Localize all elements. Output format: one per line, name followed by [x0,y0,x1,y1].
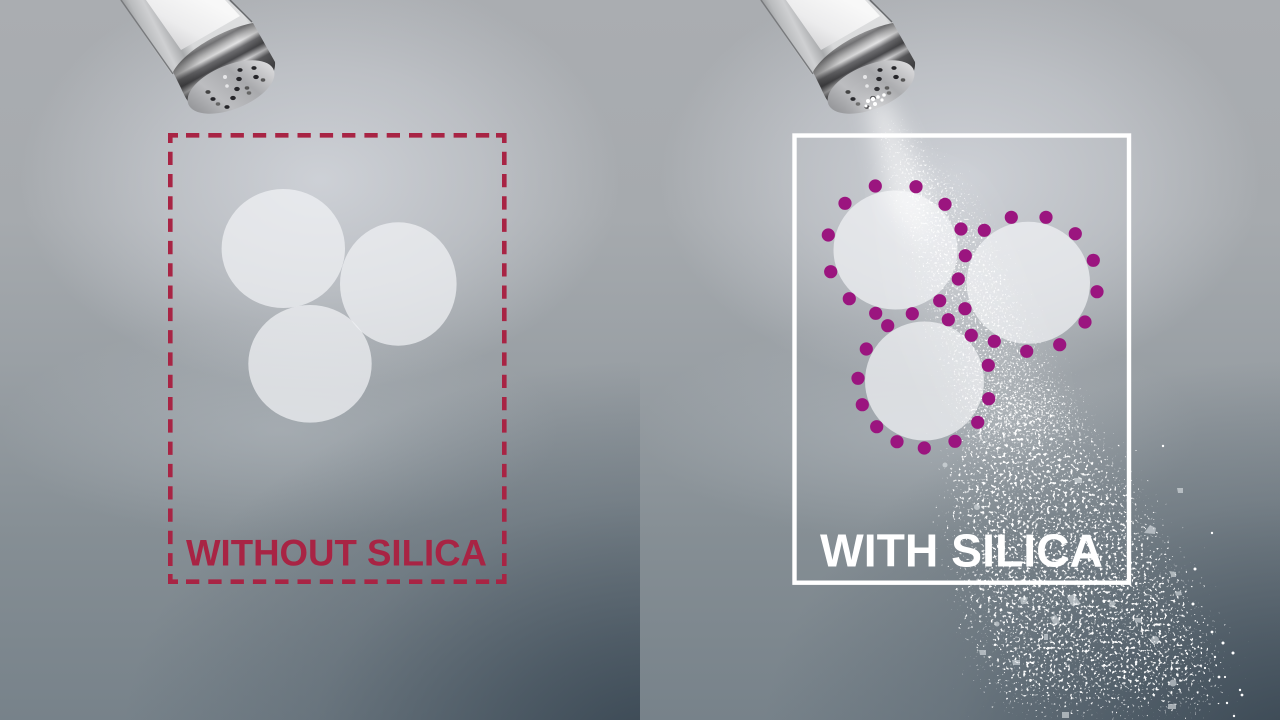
panel: with silica [640,0,1280,720]
wide mist [890,170,1050,450]
flakes [942,462,1183,718]
fine grains [862,100,1120,470]
label: without silica: WITHOUT SILICA [186,533,487,574]
silica stream [862,93,1250,720]
dashed frame [170,135,504,582]
isolated specks [1162,445,1243,717]
mist [866,100,930,250]
panel: without silica [0,0,640,720]
coarse grains [925,350,1250,720]
circles: particles coated with silica [834,190,1090,440]
particles without silica [222,189,457,423]
white frame [794,136,1129,583]
icon: salt shaker pouring [760,0,922,125]
label: with silica: WITH SILICA [820,525,1103,577]
silica dots [822,179,1104,455]
icon: salt shaker [120,0,282,125]
burst at shaker holes [864,93,886,109]
